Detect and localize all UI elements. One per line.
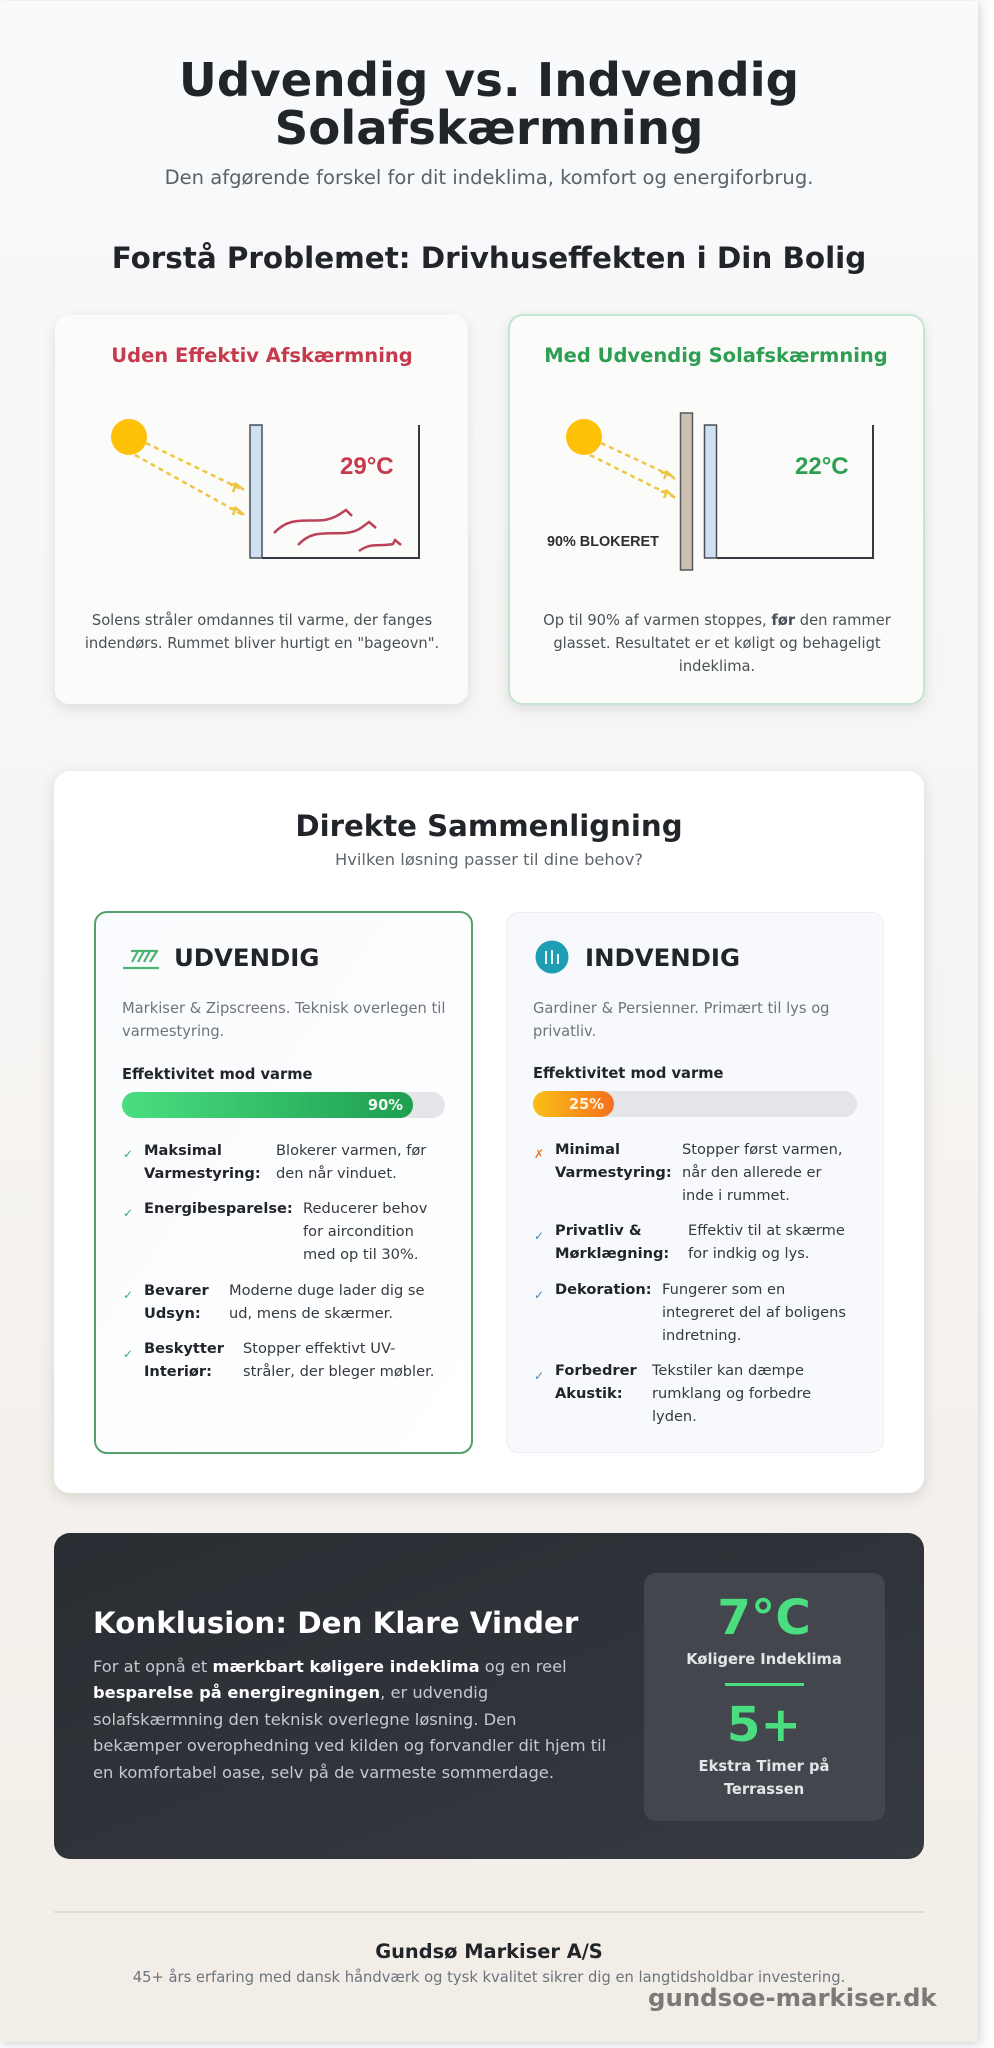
stats box [644,1573,885,1821]
benefit: privatliv: Privatliv & [555,1222,642,1239]
panel: uden effektiv afskærmning [55,315,468,704]
body text: solafskærmning den teknisk overlegne løsning. Den [93,1710,516,1729]
benefit: akustik: ✓ [534,1369,544,1383]
title: Solafskærmning [275,102,703,156]
body text: mærkbart køligere indeklima og en reel [212,1657,567,1676]
stat: 5+: 5+ [727,1697,801,1753]
icon: blinds [536,940,568,974]
body text: en komfortabel oase, selv på de varmeste sommerdage. [93,1763,554,1782]
drawback: minimal varmestyring: Stopper først varmen, [682,1141,842,1158]
drawback: minimal varmestyring [534,1141,842,1204]
stat: 7°C: 7°C [717,1590,811,1646]
efficiency bar [533,1091,857,1117]
efficiency bar: 90% [368,1097,403,1114]
benefit: akustik: Tekstiler kan dæmpe [651,1362,804,1379]
subtitle: Den afgørende forskel for dit indeklima, komfort og energiforbrug. [165,166,813,189]
description: varmestyring. [122,1023,224,1040]
benefit: akustik: Akustik: [555,1385,623,1402]
benefit: akustik: Forbedrer [555,1362,637,1379]
tagline: 45+ års erfaring med dansk håndværk og tysk kvalitet sikrer dig en langtidsholdbar investering. [133,1969,845,1986]
benefit: privatliv: Mørklægning: [555,1245,669,1262]
benefit: beskytter interiør [123,1340,434,1380]
external screen [680,413,692,570]
benefit: bevarer udsyn: Bevarer [144,1282,209,1299]
card text: Op til 90% af varmen stoppes, før den rammer [543,612,891,629]
benefit: bevarer udsyn: Udsyn: [144,1305,201,1322]
card heading: Med Udvendig Solafskærmning [544,344,888,367]
room walls [262,425,419,558]
panel: direkte sammenligning [54,771,924,1493]
blocked label: 90% BLOKERET [547,534,659,550]
drawback: minimal varmestyring: Minimal [555,1141,620,1158]
benefit: bevarer udsyn: ud, mens de skærmer. [229,1305,393,1322]
benefit: maksimal varmestyring: ✓ [123,1147,133,1161]
body text: bekæmper overophedning ved kilden og forvandler dit hjem til [93,1736,606,1755]
drawback: minimal varmestyring: når den allerede er [682,1164,822,1181]
efficiency bar: 25% [569,1096,604,1113]
benefit: bevarer udsyn: Moderne duge lader dig se [229,1282,424,1299]
sun rays [590,443,675,498]
benefit: privatliv [534,1222,845,1262]
benefit: bevarer udsyn: ✓ [123,1288,133,1302]
benefit: akustik: lyden. [652,1408,697,1425]
benefit: maksimal varmestyring [123,1142,426,1182]
benefit: energibesparelse: Energibesparelse: [144,1200,293,1217]
benefit: dekoration: ✓ [534,1288,544,1302]
card text: indendørs. Rummet bliver hurtigt en "bageovn". [85,635,439,652]
body text: besparelse på energiregningen [93,1683,380,1702]
window glass [704,425,716,558]
benefit: beskytter interiør: stråler, der bleger møbler. [243,1363,434,1380]
card text: indeklima. [679,658,755,675]
diagram: room with external shading [547,413,873,570]
benefit: maksimal varmestyring: Maksimal [144,1142,222,1159]
body text: For at opnå et [93,1657,212,1676]
benefit: energibesparelse: for aircondition [303,1223,414,1240]
description: Markiser & Zipscreens. Teknisk overlegen til [122,1000,445,1017]
benefit: privatliv: Effektiv til at skærme [688,1222,845,1239]
subheading: Hvilken løsning passer til dine behov? [335,850,643,869]
description: Gardiner & Persienner. Primært til lys og [533,1000,830,1017]
benefit: beskytter interiør: Stopper effektivt UV- [243,1340,395,1357]
footer [133,1940,845,1986]
column: udvendig [95,912,472,1453]
description: privatliv. [533,1023,596,1040]
card text: glasset. Resultatet er et køligt og behageligt [553,635,881,652]
temperature: 29°C [340,453,394,480]
panel: konklusion [54,1533,924,1859]
body text: , er udvendig [380,1683,488,1702]
benefit: maksimal varmestyring: den når vinduet. [276,1165,397,1182]
benefit: energibesparelse: ✓ [123,1206,133,1220]
card text: Solens stråler omdannes til varme, der fanges [92,612,432,629]
heat waves [274,510,401,551]
drawback: minimal varmestyring: Varmestyring: [555,1164,672,1181]
benefit: maksimal varmestyring: Blokerer varmen, før [276,1142,426,1159]
column heading: INDVENDIG [585,943,740,972]
benefit: privatliv: ✓ [534,1229,544,1243]
heading: Direkte Sammenligning [295,809,683,843]
stat label: Køligere Indeklima [686,1651,842,1668]
window glass [250,425,262,558]
card heading: Uden Effektiv Afskærmning [111,344,413,367]
benefit: beskytter interiør: ✓ [123,1347,133,1361]
room walls [717,425,873,558]
stat label: Terrassen [724,1781,804,1798]
icon: sun [111,419,147,455]
drawback: minimal varmestyring: inde i rummet. [682,1187,790,1204]
header [165,54,813,189]
benefit: energibesparelse: Reducerer behov [303,1200,428,1217]
heading: Konklusion: Den Klare Vinder [93,1606,579,1640]
benefit: energibesparelse [123,1200,428,1263]
watermark: gundsoe-markiser.dk [648,1983,937,2012]
benefit: dekoration: integreret del af boligens [662,1304,846,1321]
benefit: bevarer udsyn [123,1282,424,1322]
benefit: energibesparelse: med op til 30%. [303,1246,418,1263]
section heading: Forstå Problemet: Drivhuseffekten i Din Bolig [112,240,866,275]
temperature: 22°C [795,453,849,480]
benefit: dekoration: Fungerer som en [662,1281,785,1298]
diagram: room without shading [111,419,419,558]
benefit: beskytter interiør: Interiør: [144,1363,212,1380]
benefit: beskytter interiør: Beskytter [144,1340,225,1357]
title: Udvendig vs. Indvendig [179,54,799,108]
benefit: dekoration [534,1281,846,1344]
benefit: privatliv: for indkig og lys. [688,1245,809,1262]
company name: Gundsø Markiser A/S [375,1940,603,1963]
benefit: akustik: rumklang og forbedre [652,1385,811,1402]
efficiency label: Effektivitet mod varme [122,1066,312,1083]
benefit: dekoration: Dekoration: [555,1281,652,1298]
efficiency label: Effektivitet mod varme [533,1065,723,1082]
drawback: minimal varmestyring: ✗ [534,1147,544,1161]
column heading: UDVENDIG [174,943,319,972]
efficiency bar [122,1092,445,1118]
icon: sun [566,419,602,455]
stat label: Ekstra Timer på [699,1758,829,1775]
icon: awning [123,951,159,968]
benefit: dekoration: indretning. [662,1327,741,1344]
sun rays [135,443,244,515]
panel: med udvendig solafskærmning [509,315,924,704]
column: indvendig [506,912,884,1452]
benefit: maksimal varmestyring: Varmestyring: [144,1165,261,1182]
benefit: akustik [534,1362,811,1425]
